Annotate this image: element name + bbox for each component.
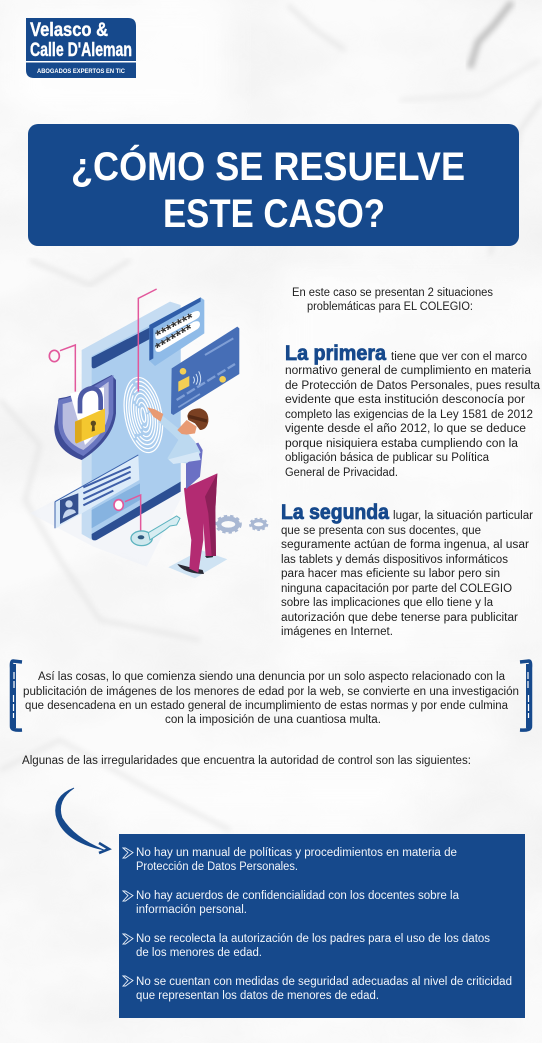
ID card [55, 455, 139, 528]
panel: irregularities list: información personal. [136, 904, 247, 916]
conclusion paragraph: que desencadena en un estado general de incumplimiento de estas normas y por ende culmina [25, 700, 509, 712]
conclusion paragraph: publicitación de imágenes de los menores de edad por la web, se convierte en una investigación [23, 686, 519, 698]
panel: irregularities list: No se recolecta la autorización de los padres para el uso de los datos [136, 933, 490, 945]
text block: La primera: La primera [285, 342, 386, 365]
phone body [82, 302, 181, 541]
text block: La primera: vigente desde el año 2012, lo que se deduce [285, 423, 526, 435]
bullet icons [123, 848, 133, 986]
text block: La primera: evidente que esta institución desconocía por [285, 394, 525, 406]
text block: La primera: General de Privacidad. [285, 467, 398, 479]
text block: La primera: porque nisiquiera estaba cumpliendo con la [285, 438, 519, 450]
text block: La primera: obligación básica de publicar su Política [285, 452, 490, 464]
panel: irregularities list [119, 834, 525, 1018]
fingerprint [119, 374, 168, 456]
logo: Velasco & Calle D'Aleman: ABOGADOS EXPERTOS EN TIC [37, 68, 125, 75]
text block: La segunda: que se presenta con sus docentes, que [281, 525, 481, 537]
shield with padlock [54, 375, 116, 460]
panel: irregularities list: de los menores de edad. [136, 947, 262, 959]
curved arrow [56, 788, 109, 853]
text block: La segunda: lugar, la situación particular [393, 510, 533, 522]
pink connector lines [49, 289, 157, 538]
text block: La segunda: imágenes en Internet. [281, 626, 393, 638]
conclusion paragraph: Así las cosas, lo que comienza siendo una denuncia por un solo aspecto relacionado con la [38, 671, 506, 683]
intro text [292, 287, 493, 313]
password card: ******* [153, 310, 197, 343]
text block: La segunda: para hacer mas eficiente su labor pero sin [281, 568, 500, 580]
intro text: En este caso se presentan 2 situaciones [292, 287, 493, 299]
text block: La primera [285, 342, 541, 479]
text block: La primera: normativo general de cumplimiento en materia [285, 365, 532, 377]
conclusion paragraph: con la imposición de una cuantiosa multa. [165, 714, 381, 726]
text block: La segunda: sobre las implicaciones que ello tiene y la [281, 597, 494, 609]
icon: left bracket [10, 661, 22, 730]
text block: La segunda: La segunda [281, 501, 389, 524]
key [131, 516, 180, 546]
text block: La segunda: seguramente actúan de forma ingenua, al usar [281, 539, 529, 551]
text block: La primera: completo las exigencias de la Ley 1581 de 2012 [285, 409, 533, 421]
lead-in text: Algunas de las irregularidades que encuentra la autoridad de control son las siguientes: [22, 755, 471, 767]
floor shadow [30, 480, 183, 567]
text block: La primera: tiene que ver con el marco [391, 351, 527, 363]
text block: La segunda: las tablets y demás dispositivos informáticos [281, 554, 508, 566]
icon: right bracket [520, 661, 532, 730]
illustration: digital security with phone, fingerprint and man [30, 289, 267, 578]
password card [149, 297, 204, 366]
panel: irregularities list: No se cuentan con medidas de seguridad adecuadas al nivel de criticidad [136, 976, 512, 988]
title banner: ¿CÓMO SE RESUELVE [71, 143, 465, 189]
title banner [28, 124, 519, 246]
text block: La primera: de Protección de Datos Personales, pues resulta [285, 380, 541, 392]
logo: Velasco & Calle D'Aleman [26, 18, 136, 78]
password card: ******* [152, 321, 196, 355]
text block: La segunda: ninguna capacitación por parte del COLEGIO [281, 583, 512, 595]
title banner: ESTE CASO? [163, 192, 385, 236]
man [147, 407, 227, 578]
credit card [171, 327, 239, 415]
logo: Velasco & Calle D'Aleman: Velasco & [30, 20, 108, 41]
panel: irregularities list: No hay un manual de políticas y procedimientos en materia de [136, 847, 457, 859]
conclusion paragraph [23, 671, 519, 726]
logo: Velasco & Calle D'Aleman: Calle D'Aleman [30, 40, 132, 61]
gears [216, 516, 267, 533]
text block: La segunda: autorización que debe tenerse para publicitar [281, 612, 518, 624]
intro text: problemáticas para EL COLEGIO: [307, 301, 473, 313]
panel: irregularities list: que representan los datos de menores de edad. [136, 990, 379, 1002]
panel: irregularities list: No hay acuerdos de confidencialidad con los docentes sobre la [136, 890, 460, 902]
panel: irregularities list: Protección de Datos Personales. [136, 861, 298, 873]
text block: La segunda [281, 501, 533, 638]
